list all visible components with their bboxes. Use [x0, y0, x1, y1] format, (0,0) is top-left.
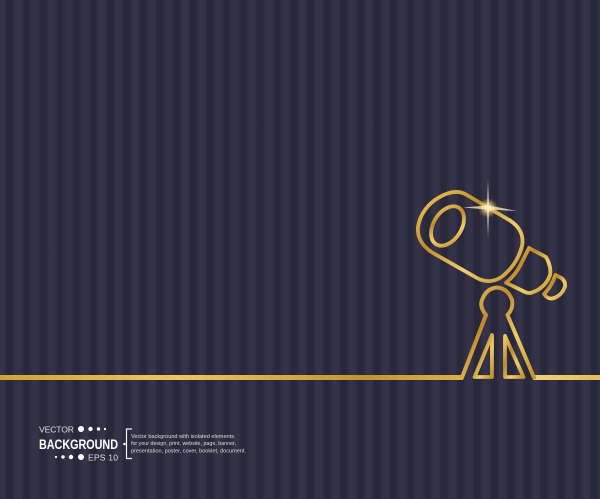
description text: presentation, poster, cover, booklet, document.: [131, 448, 246, 454]
tripod right leg: [505, 336, 524, 377]
telescope end cap: [544, 275, 565, 299]
gold horizontal line: [0, 375, 600, 380]
dots bottom: [55, 454, 84, 460]
dots top: [78, 426, 106, 432]
description text: for your design, print, website, page, banner,: [131, 441, 236, 447]
icon: telescope: [418, 192, 565, 378]
bracket: [123, 429, 132, 458]
tripod left leg: [474, 335, 492, 377]
tripod body: [462, 288, 534, 378]
description text: [131, 434, 246, 454]
label: EPS 10: EPS 10: [88, 452, 118, 462]
icon: sparkle: [463, 180, 517, 238]
label: BACKGROUND: BACKGROUND: [39, 437, 118, 452]
telescope lens: [424, 200, 471, 252]
label: VECTOR: VECTOR: [39, 424, 74, 434]
description text: Vector background with isolated elements: [131, 434, 234, 440]
telescope eyepiece: [506, 248, 550, 293]
telescope tube: [418, 192, 522, 281]
